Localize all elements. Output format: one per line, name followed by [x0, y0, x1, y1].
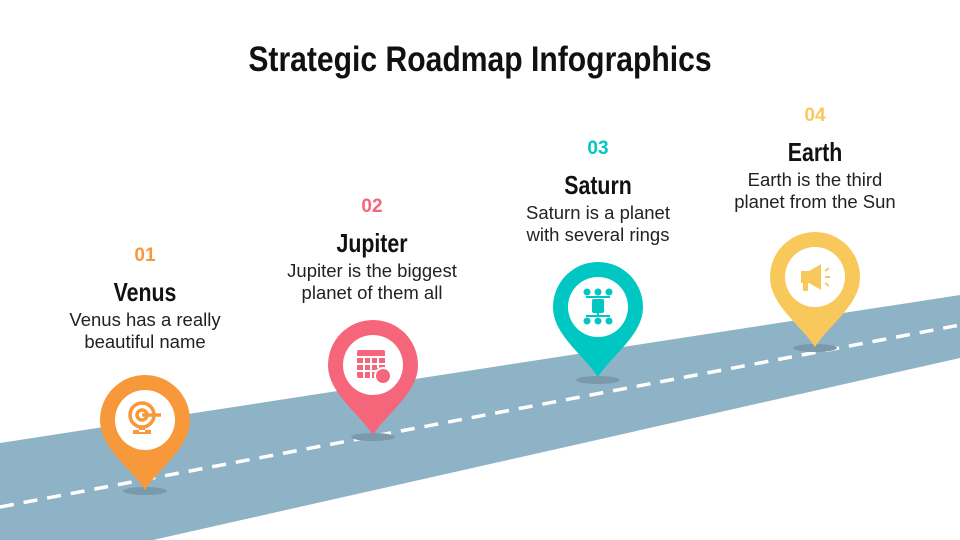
text: earth: 04 [804, 105, 826, 126]
text: saturn: 03 [587, 138, 609, 159]
icon: target [130, 403, 161, 427]
text: jupiter [287, 196, 457, 303]
text: venus: Venus [114, 277, 176, 307]
text: jupiter: Jupiter is the biggest [287, 260, 457, 281]
text: saturn: Saturn is a planet [526, 202, 670, 223]
text: jupiter: planet of them all [302, 282, 442, 303]
text: saturn [526, 138, 670, 245]
text: venus: 01 [134, 245, 156, 266]
text: venus [69, 245, 221, 352]
text: earth: planet from the Sun [734, 191, 896, 212]
pin: jupiter [328, 320, 418, 441]
text: jupiter: 02 [361, 196, 383, 217]
text: earth [734, 105, 896, 212]
text: saturn: with several rings [527, 224, 669, 245]
title: Strategic Roadmap Infographics [248, 40, 712, 79]
pin: earth [770, 232, 860, 352]
icon: hierarchy [584, 288, 612, 324]
text: venus: beautiful name [84, 331, 206, 352]
icon: calendar [357, 350, 391, 384]
text: earth: Earth [788, 137, 842, 167]
text: saturn: Saturn [564, 170, 632, 200]
text: earth: Earth is the third [748, 169, 882, 190]
text: venus: Venus has a really [69, 309, 221, 330]
pin: venus [100, 375, 190, 495]
icon: megaphone [801, 264, 821, 291]
pin: saturn [553, 262, 643, 384]
text: jupiter: Jupiter [336, 228, 408, 258]
